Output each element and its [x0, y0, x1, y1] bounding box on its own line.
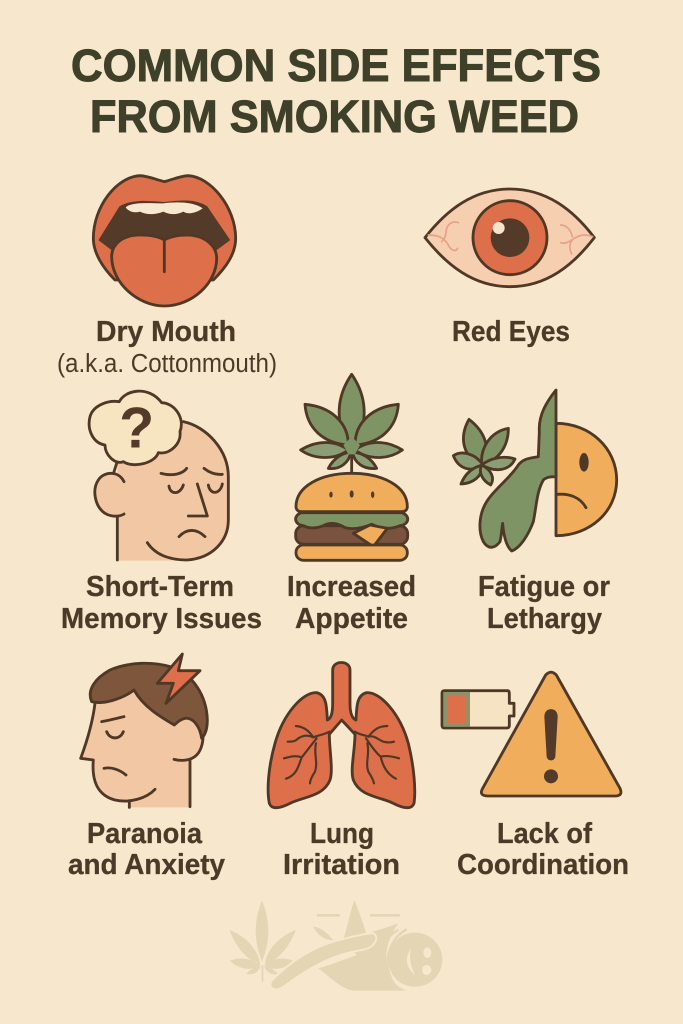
- icon: battery and warning triangle: [442, 672, 621, 796]
- battery: [442, 691, 514, 728]
- small leaf: [453, 419, 515, 485]
- label: lung irritation: [283, 818, 400, 881]
- label: paranoia and anxiety: and Anxiety: [68, 849, 225, 881]
- label: lack of coordination: [457, 818, 629, 881]
- label: lung irritation: Irritation: [283, 849, 400, 881]
- icon: paranoia head: [81, 654, 207, 807]
- faded joint: [270, 933, 376, 989]
- label: short-term memory issues: [61, 571, 262, 635]
- label: fatigue or lethargy: Fatigue or: [478, 571, 610, 603]
- label: increased appetite: [287, 571, 416, 635]
- warning triangle: [481, 672, 621, 796]
- icon: cannabis leaf on burger: [296, 374, 408, 560]
- title: FROM SMOKING WEED: [90, 91, 579, 142]
- title: [71, 40, 601, 142]
- label: paranoia and anxiety: [68, 818, 225, 881]
- stem: [347, 455, 356, 473]
- label: short-term memory issues: Short-Term: [86, 571, 234, 603]
- label: dry mouth: (a.k.a. Cottonmouth): [57, 350, 277, 378]
- watermark: leaf, joint and smiley: [229, 900, 442, 991]
- label: increased appetite: Increased: [287, 571, 416, 603]
- title: COMMON SIDE EFFECTS: [71, 40, 601, 91]
- label: dry mouth: Dry Mouth: [96, 316, 236, 348]
- label: paranoia and anxiety: Paranoia: [87, 818, 203, 850]
- burger: [296, 473, 408, 560]
- icon: lungs: [268, 662, 415, 808]
- icon: memory head: ?: [119, 397, 154, 461]
- faded smiley: [388, 933, 442, 987]
- faded cannabis blob behind joint: [318, 900, 407, 991]
- label: dry mouth: [57, 316, 277, 378]
- label: fatigue or lethargy: [478, 571, 610, 635]
- faded leaf: [229, 901, 296, 974]
- icon: dry mouth: [93, 176, 236, 306]
- leaf: [301, 374, 402, 469]
- icon: fatigue leaf and half face: [453, 390, 617, 551]
- label: short-term memory issues: Memory Issues: [61, 603, 262, 635]
- label: lack of coordination: Coordination: [457, 849, 629, 881]
- icon: memory head: [89, 391, 228, 561]
- label: lack of coordination: Lack of: [497, 818, 592, 850]
- label: lung irritation: Lung: [310, 818, 374, 850]
- green shape: [480, 390, 556, 551]
- icon: red eye: [425, 189, 594, 287]
- label: fatigue or lethargy: Lethargy: [487, 603, 602, 635]
- half face: [556, 423, 617, 536]
- label: red eyes: Red Eyes: [452, 316, 570, 348]
- label: increased appetite: Appetite: [295, 603, 408, 635]
